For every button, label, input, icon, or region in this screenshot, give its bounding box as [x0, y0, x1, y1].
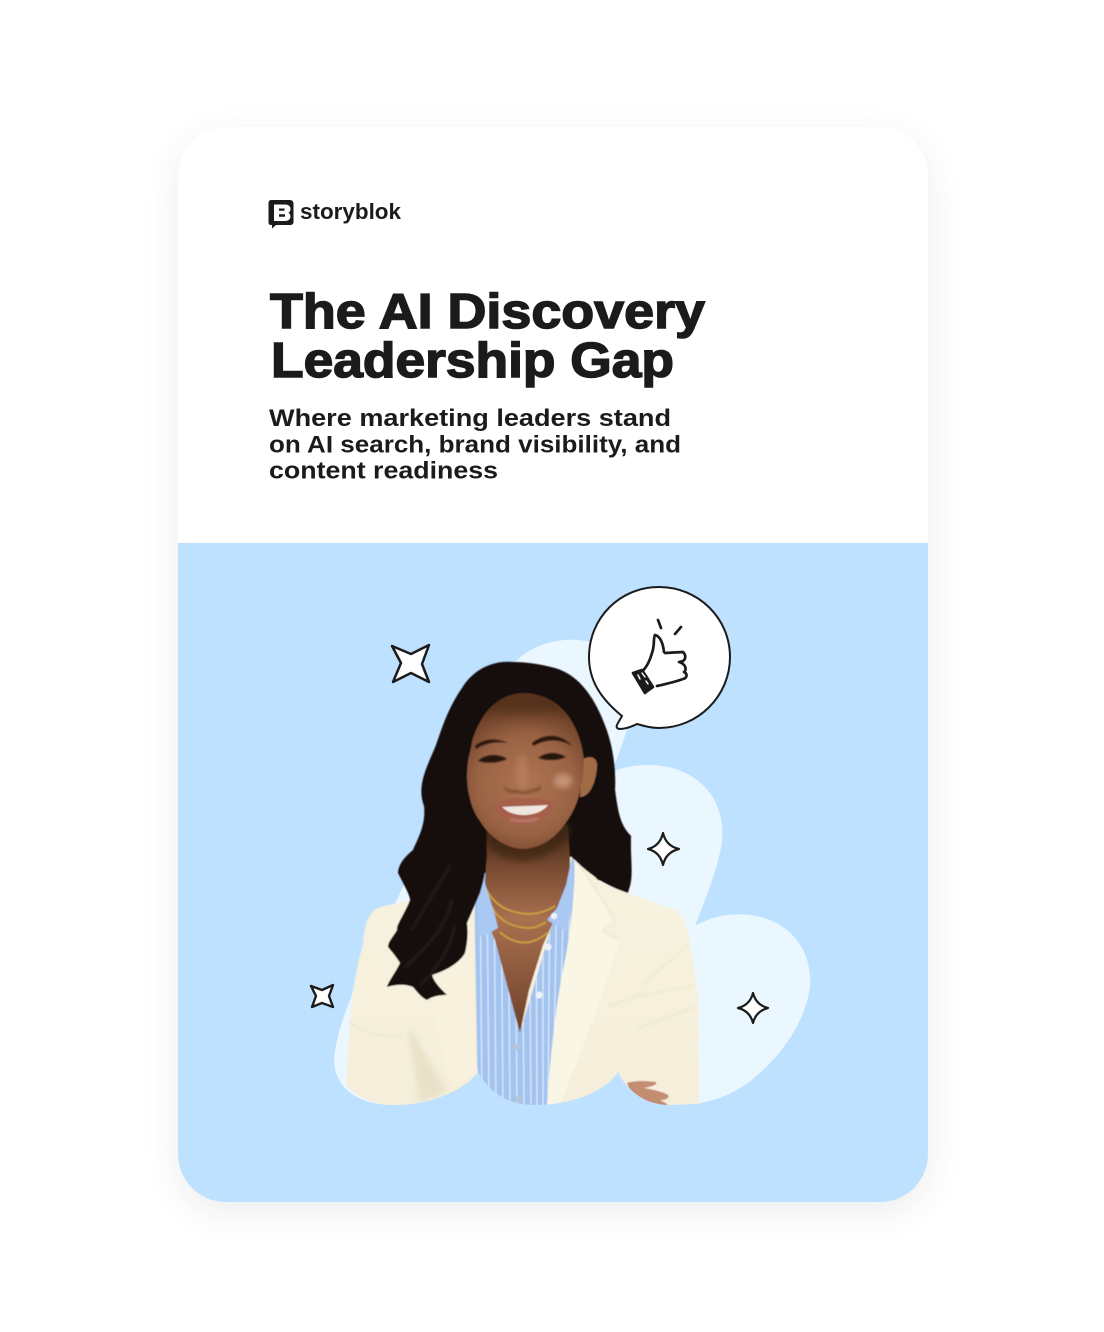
front hair left: [386, 850, 488, 1000]
shirt: [474, 858, 575, 1105]
hand: [627, 1081, 669, 1106]
necklaces: [486, 889, 555, 943]
title: [270, 285, 705, 388]
icon: storyblok speech-square mark: [268, 200, 294, 228]
pale blue blob background: [334, 640, 810, 1105]
blazer lapels: [434, 856, 620, 1104]
speech bubble: [589, 587, 730, 729]
neck shadow: [488, 825, 570, 861]
panel: blue illustration background: [178, 543, 928, 1202]
subtitle: Where marketing leaders stand: [269, 405, 671, 432]
panel: report cover card: [178, 127, 928, 1202]
subtitle: content readiness: [269, 458, 498, 484]
front hair right: [570, 728, 631, 893]
wordmark: storyblok: [300, 199, 402, 224]
blazer body: [346, 856, 699, 1106]
subtitle: on AI search, brand visibility, and: [269, 432, 681, 458]
icon: sparkle lower left: [311, 985, 333, 1007]
mouth: [493, 798, 555, 825]
icon: thumbs up: [633, 620, 687, 693]
logo: storyblok: [268, 199, 402, 228]
cover artwork: [268, 200, 810, 1105]
forehead shade: [483, 692, 570, 720]
title: The AI Discovery: [270, 285, 705, 339]
icon: sparkle lower right: [738, 993, 768, 1023]
shirt collar: [477, 857, 574, 1102]
lower lip sheen: [510, 818, 538, 821]
nose: [505, 786, 540, 793]
title: Leadership Gap: [271, 334, 674, 388]
eyes: [478, 755, 507, 763]
speech bubble with thumbs up: [589, 587, 730, 729]
icon: sparkle centre right: [648, 833, 679, 865]
blazer shadow: [409, 1032, 446, 1102]
face: [466, 692, 584, 850]
cheek highlight: [554, 774, 572, 788]
teeth: [502, 805, 548, 815]
woman portrait: [346, 662, 699, 1110]
icon: sparkle upper left: [392, 645, 429, 682]
face shape: [466, 692, 584, 850]
eyebrows: [475, 736, 572, 749]
nose highlight: [517, 757, 527, 784]
ear: [580, 757, 597, 797]
back hair: [398, 660, 632, 889]
blazer shading: [350, 945, 697, 1036]
subtitle: [269, 405, 681, 484]
neck and chest: [484, 825, 570, 1033]
